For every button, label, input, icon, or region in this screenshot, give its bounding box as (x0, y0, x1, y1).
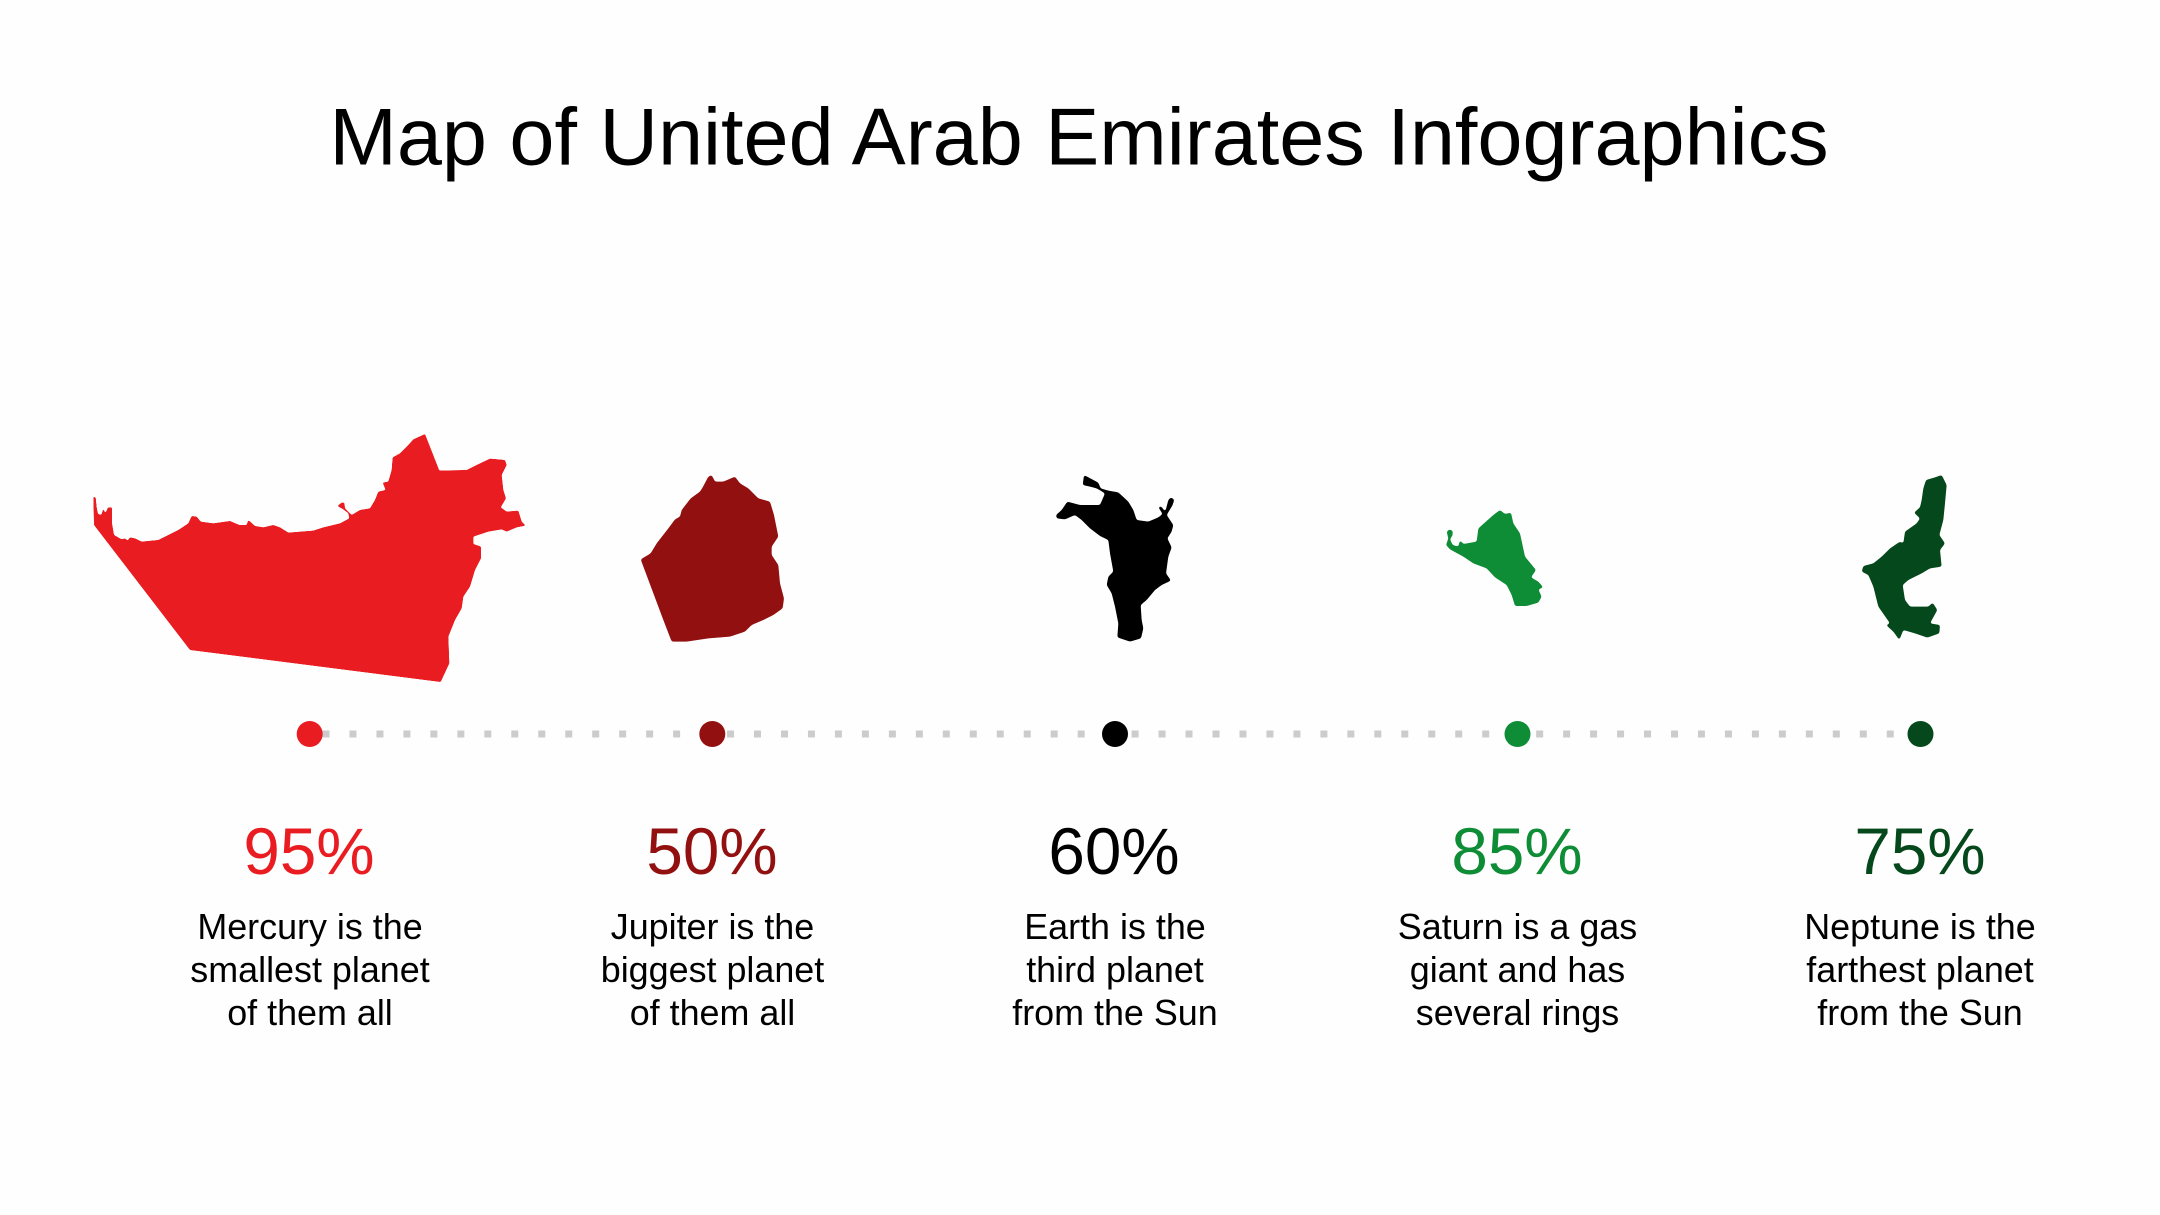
description: Neptune: farthest planet (1806, 950, 2034, 990)
map: dark green emirate (1862, 475, 1947, 640)
description: Jupiter: biggest planet (601, 950, 824, 990)
value: 95%: 95% (243, 815, 375, 888)
description: Saturn: giant and has (1410, 950, 1625, 990)
map: dark red emirate (641, 475, 784, 642)
title: Map of United Arab Emirates Infographics (329, 92, 1829, 182)
panel: Dubai 50% (601, 475, 824, 1033)
value: 50%: 50% (646, 815, 778, 888)
value: 60%: 60% (1048, 815, 1180, 888)
description: Earth: third planet (1026, 950, 1204, 990)
map: green emirate (1446, 510, 1543, 606)
description: Jupiter: Jupiter is the (611, 907, 814, 947)
map: red emirate (93, 434, 526, 682)
description: Mercury: Mercury is the (197, 907, 423, 947)
description: Neptune: Neptune is the (1804, 907, 2036, 947)
description: Earth: Earth is the (1024, 907, 1206, 947)
panel: Ras Al Khaimah 75% (1804, 475, 2036, 1033)
description: Earth: from the Sun (1012, 993, 1218, 1033)
panel: Abu Dhabi 95% (93, 434, 526, 1033)
description: Saturn: several rings (1416, 993, 1619, 1033)
description: Mercury: smallest planet (190, 950, 430, 990)
panel: Sharjah 60% (1012, 475, 1218, 1033)
description: Saturn: Saturn is a gas (1398, 907, 1637, 947)
description: Neptune: from the Sun (1817, 993, 2023, 1033)
map: black emirate (1056, 475, 1174, 642)
value: 75%: 75% (1854, 815, 1986, 888)
description: Jupiter: of them all (630, 993, 795, 1033)
description: Mercury: of them all (227, 993, 393, 1033)
timeline: dotted line with markers (297, 721, 1934, 747)
value: 85%: 85% (1451, 815, 1583, 888)
panel: Ajman 85% (1398, 510, 1637, 1033)
